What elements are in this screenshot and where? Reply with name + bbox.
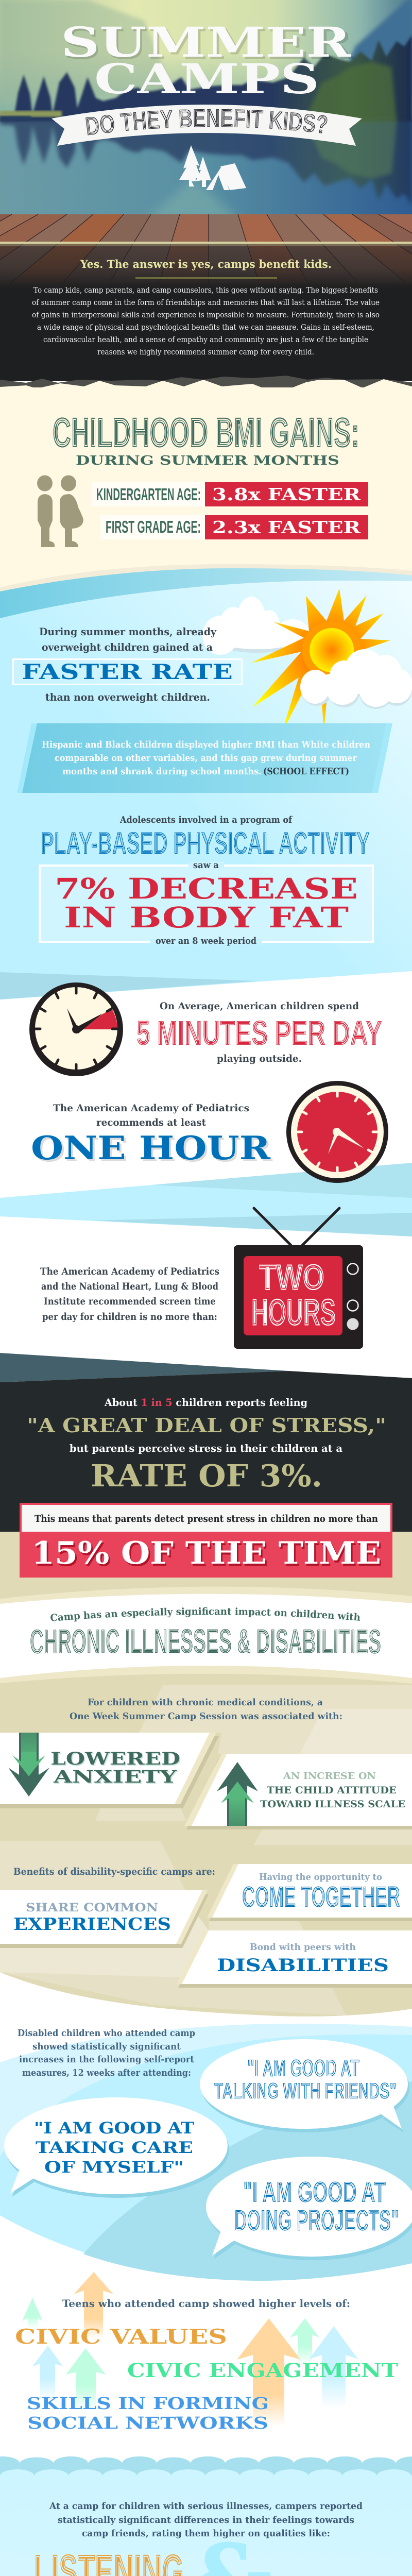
callout: 15% of the time	[20, 1503, 392, 1578]
text: faster rate statement: overweight children gained at a	[42, 641, 213, 653]
card: bond with peers: Bond with peers with	[250, 1942, 356, 1953]
panel: school effect note	[17, 723, 392, 793]
stat row: kindergarten: 3.8x FASTER	[212, 484, 361, 504]
text: faster rate statement	[13, 625, 242, 703]
panel: camp benefits	[0, 1666, 412, 2016]
intro paragraph: cardiovascular health, and a sense of empathy and community are just a few of the tangible	[43, 335, 368, 344]
text: one hour	[31, 1103, 273, 1169]
panel: childhood BMI gains	[37, 410, 368, 547]
icon: cloud in front of sun	[300, 649, 412, 709]
callout: 7% decrease in body fat: IN BODY FAT	[64, 901, 349, 934]
stat row: first grade: FIRST GRADE AGE:	[106, 517, 201, 536]
card: lowered anxiety: LOWERED	[50, 1749, 180, 1769]
callout: faster rate: FASTER RATE	[22, 660, 233, 684]
quote heading: "A GREAT DEAL OF STRESS,"	[27, 1414, 386, 1437]
text: 5 minutes per day: On Average, American children spend	[160, 1001, 359, 1012]
speech bubble: talking with friends	[200, 2039, 409, 2132]
intro paragraph: of summer camp come in the form of friendships and memories that will last a lifetime. The value	[32, 298, 380, 307]
icon: down arrow	[8, 1733, 49, 1797]
stat row: first grade	[100, 515, 368, 539]
text: screen time: per day for children is no more than:	[42, 1311, 217, 1323]
callout: 15% of the time: 15% OF THE TIME	[31, 1535, 381, 1571]
speech bubble: taking care of myself: OF MYSELF"	[44, 2158, 184, 2177]
ribbon banner: DO THEY BENEFIT KIDS?	[85, 109, 328, 135]
hero panel	[0, 0, 412, 381]
text: disabled children: increases in the following self-report	[19, 2054, 195, 2065]
speech bubble: taking care of myself	[4, 2097, 229, 2198]
title: CAMPS	[94, 55, 319, 103]
panel: school effect note: months and shrank during school months.	[62, 766, 262, 777]
panel: teens civic values	[15, 2272, 399, 2433]
text: play-based activity	[41, 815, 370, 860]
icon: sun	[251, 588, 390, 733]
mountain divider	[0, 376, 412, 594]
speech bubble: taking care of myself: TAKING CARE	[36, 2139, 193, 2157]
title: SUMMER	[61, 18, 351, 66]
text: disabled children: measures, 12 weeks after attending:	[22, 2067, 191, 2078]
light blue band	[0, 1163, 412, 1236]
card: bond with peers	[177, 1930, 412, 1988]
text: screen time: and the National Heart, Lung & Blood	[41, 1281, 218, 1292]
icon: cloud behind sun	[202, 597, 310, 655]
panel: sky	[0, 564, 412, 999]
card: come together	[207, 1864, 412, 1921]
panel: stress	[0, 1353, 412, 1609]
ribbon banner	[52, 105, 362, 146]
text: camp friends: statistically significant differences in their feelings towards	[58, 2515, 354, 2526]
title	[61, 18, 354, 103]
lake landscape photo	[0, 0, 412, 222]
panel: self-report quotes	[0, 2024, 412, 2281]
text: one week session: For children with chronic medical conditions, a	[88, 1697, 323, 1708]
text: one hour: ONE HOUR	[31, 1129, 271, 1167]
callout: faster rate	[13, 659, 242, 684]
panel: serious illnesses	[0, 2481, 412, 2576]
panel: chronic illnesses heading	[0, 1587, 412, 1654]
card: lowered anxiety: ANXIETY	[53, 1767, 177, 1787]
two hours label: HOURS	[251, 1292, 336, 1333]
card: come together: Having the opportunity to	[259, 1872, 382, 1883]
text: camp friends	[49, 2501, 363, 2539]
card: child attitude: THE CHILD ATTITUDE	[267, 1785, 397, 1796]
text: screen time: Institute recommended screen time	[44, 1296, 216, 1307]
subheading: DURING SUMMER MONTHS	[76, 453, 339, 468]
icon: trees and tent	[179, 145, 246, 190]
label: civic values: CIVIC VALUES	[15, 2325, 227, 2349]
panel: school effect note: comparable on other variables, and this gap grew during summer	[55, 753, 357, 764]
icon: red clock	[286, 1081, 388, 1183]
text: disabled children: showed statistically significant	[32, 2041, 181, 2052]
callout: 7% decrease in body fat: over an 8 week period	[156, 936, 256, 946]
text: faster rate statement: than non overweight children.	[45, 691, 210, 703]
panel: chronic illnesses heading: CHRONIC ILLNESSES & DISABILITIES	[30, 1629, 381, 1654]
panel: chronic illnesses heading: Camp has an especially significant impact on children with	[50, 1607, 360, 1622]
card: share common experiences	[0, 1890, 209, 1948]
text: faster rate statement: During summer months, already	[39, 625, 217, 638]
intro paragraph: reasons we highly recommend summer camp for every child.	[97, 347, 314, 357]
text: camp friends: At a camp for children with serious illnesses, campers reported	[49, 2501, 363, 2512]
icon: two children	[37, 475, 83, 547]
text: disabled children	[18, 2028, 195, 2078]
text: 5 minutes per day	[136, 1001, 382, 1064]
icon: television	[234, 1208, 363, 1349]
panel: school effect note: Hispanic and Black children displayed higher BMI than White children	[42, 739, 370, 750]
text: parents perceive: but parents perceive stress in their children at a	[70, 1442, 342, 1454]
heading: benefits of disability-specific camps: Benefits of disability-specific camps are:	[13, 1866, 215, 1877]
card: share common experiences: EXPERIENCES	[13, 1914, 171, 1934]
card: bond with peers: DISABILITIES	[217, 1955, 389, 1976]
icon: clock with red wedge	[29, 982, 123, 1076]
text: one hour: The American Academy of Pediatrics	[53, 1103, 249, 1114]
intro paragraph: of gains in interpersonal skills and experience is impossible to measure. Fortunately, there is also	[32, 310, 380, 319]
stat row: first grade: 2.3x FASTER	[212, 517, 361, 537]
card: share common experiences: SHARE COMMON	[26, 1901, 158, 1914]
two hours label: TWO	[259, 1257, 324, 1297]
panel: school effect note: (SCHOOL EFFECT)	[263, 766, 349, 777]
text: camp friends: camp friends, rating them higher on qualities like:	[82, 2528, 330, 2539]
label: skills in forming social networks: SKILLS IN FORMING	[27, 2394, 269, 2413]
scalloped divider	[0, 2456, 412, 2483]
text: one hour: ONE HOUR	[33, 1131, 273, 1169]
speech bubble: doing projects	[206, 2157, 412, 2260]
wooden dock	[0, 214, 412, 292]
card: lowered anxiety: ANXIETY	[54, 1768, 178, 1788]
text: screen time	[40, 1266, 219, 1323]
intro paragraph	[32, 285, 380, 357]
callout: 7% decrease in body fat: 7% DECREASE	[55, 872, 358, 905]
card: child attitude	[184, 1754, 412, 1829]
stat: rate of 3%: RATE OF 3%.	[91, 1458, 322, 1494]
text: one week session	[70, 1697, 342, 1722]
text: disabled children: Disabled children who attended camp	[18, 2028, 195, 2039]
text: one hour: recommends at least	[96, 1117, 206, 1128]
card: lowered anxiety: LOWERED	[52, 1750, 181, 1770]
stat row: kindergarten: KINDERGARTEN AGE:	[96, 485, 201, 504]
speech bubble: taking care of myself: "I AM GOOD AT	[34, 2119, 194, 2138]
heading: teens: Teens who attended camp showed higher levels of:	[62, 2297, 350, 2310]
intro paragraph: a wide range of physical and psychological benefits that we can measure. Gains in self-esteem,	[37, 323, 374, 332]
callout: 15% of the time: 15% OF THE TIME	[33, 1537, 383, 1573]
two hours label	[251, 1257, 336, 1333]
text: one week session: One Week Summer Camp Session was associated with:	[70, 1711, 342, 1722]
heading: answer: Yes. The answer is yes, camps benefit kids.	[80, 258, 332, 270]
card: child attitude: AN INCRESE ON	[283, 1771, 376, 1782]
text: play-based activity: Adolescents involved in a program of	[119, 815, 293, 825]
label: civic engagement: CIVIC ENGAGEMENT	[127, 2359, 399, 2382]
pale arrows	[22, 2272, 358, 2427]
icon: up arrow	[217, 1762, 258, 1826]
callout: 7% decrease in body fat	[40, 860, 373, 946]
label: skills in forming social networks	[27, 2394, 269, 2433]
intro paragraph: To camp kids, camp parents, and camp counselors, this goes without saying. The biggest benefits	[33, 285, 378, 295]
title: SUMMER	[62, 20, 354, 69]
stat row: kindergarten	[92, 482, 368, 506]
card: child attitude: TOWARD ILLNESS SCALE	[260, 1799, 405, 1810]
text: 1 in 5: About 1 in 5 children reports feeling	[104, 1396, 307, 1409]
card: lowered anxiety	[0, 1733, 219, 1808]
text: 5 minutes per day: playing outside.	[217, 1053, 302, 1064]
text: screen time: The American Academy of Pediatrics	[40, 1266, 219, 1277]
label: skills in forming social networks: SOCIAL NETWORKS	[27, 2413, 268, 2433]
callout: 7% decrease in body fat: saw a	[193, 860, 219, 871]
